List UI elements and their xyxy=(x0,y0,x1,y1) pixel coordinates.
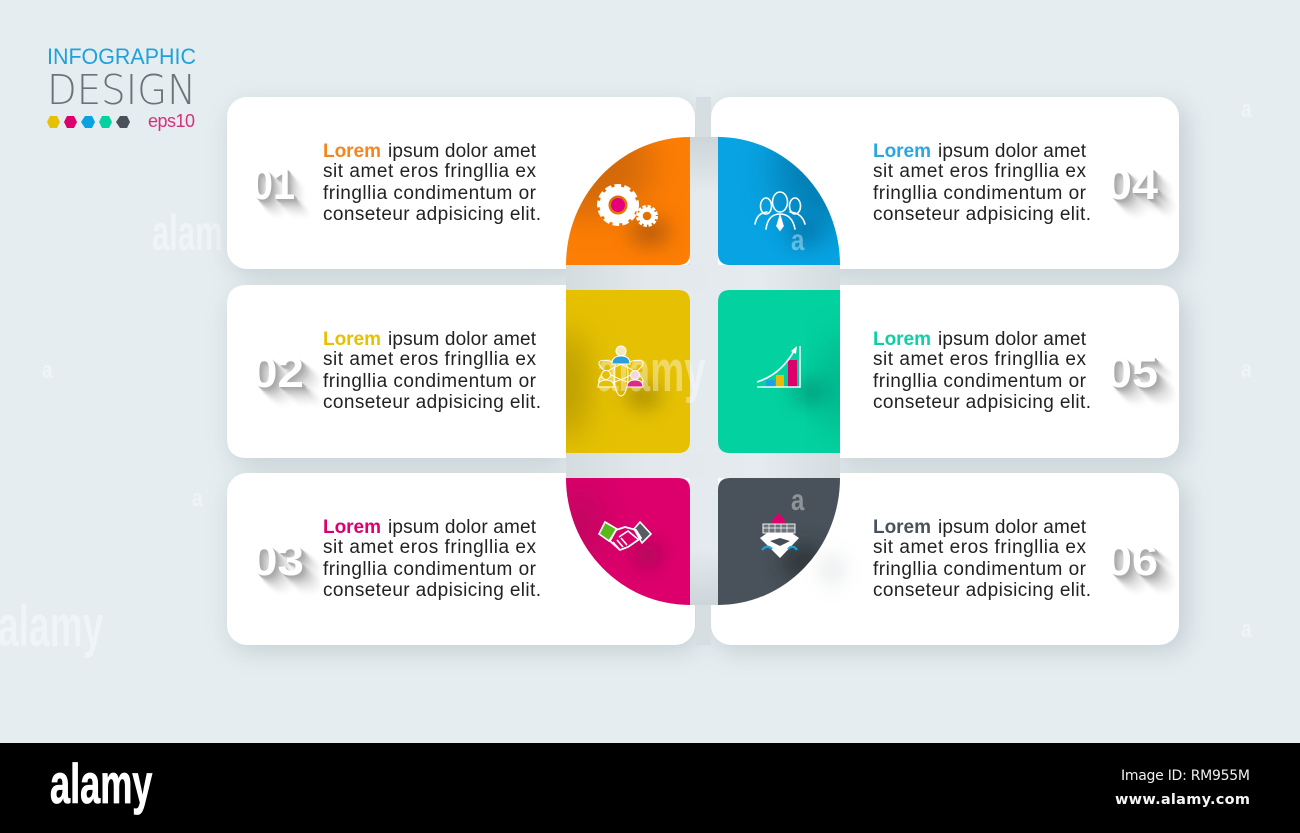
text block 01: sit amet eros fringllia ex xyxy=(323,161,536,182)
watermark: alamy left: alam xyxy=(152,204,223,261)
icon: ship xyxy=(760,513,799,558)
panel: card 06 xyxy=(711,473,1179,645)
text block 02: sit amet eros fringllia ex xyxy=(323,349,536,370)
text block 01 xyxy=(323,141,541,225)
watermark: alamy centre: alamy xyxy=(597,340,706,404)
quadrant: yellow xyxy=(566,290,690,453)
title: INFOGRAPHIC xyxy=(47,44,196,69)
number 04: 04 xyxy=(1106,160,1159,209)
number 03: 03 xyxy=(251,536,304,585)
text block 02: fringllia condimentum or xyxy=(323,371,537,392)
text block 04: fringllia condimentum or xyxy=(873,183,1087,204)
text block 05: sit amet eros fringllia ex xyxy=(873,349,1086,370)
text block 02 xyxy=(323,329,541,413)
quadrant shadow: dark grey outer xyxy=(820,554,844,586)
text block 01: ipsum dolor amet xyxy=(388,141,537,162)
text block 06: conseteur adpisicing elit. xyxy=(873,580,1091,601)
color hexagon legend xyxy=(47,116,130,128)
website: www.alamy.com xyxy=(1115,792,1250,808)
text block 04: conseteur adpisicing elit. xyxy=(873,204,1091,225)
text block 03: Lorem xyxy=(323,517,381,538)
text block 04: sit amet eros fringllia ex xyxy=(873,161,1086,182)
icon: growth chart xyxy=(757,346,800,387)
icon: people xyxy=(755,192,805,230)
title: DESIGN xyxy=(47,66,196,114)
watermark: alamy centre xyxy=(597,222,805,517)
text block 01: conseteur adpisicing elit. xyxy=(323,204,541,225)
watermark: alamy left: a xyxy=(192,484,203,512)
text block 05 xyxy=(873,329,1091,413)
quadrant: green xyxy=(718,290,840,453)
text block 01: Lorem xyxy=(323,141,381,162)
text block 05: conseteur adpisicing elit. xyxy=(873,392,1091,413)
text block 03: conseteur adpisicing elit. xyxy=(323,580,541,601)
text block 06: fringllia condimentum or xyxy=(873,559,1087,580)
quadrant: magenta xyxy=(566,478,690,605)
number 02: 02 xyxy=(251,348,304,397)
watermark: alamy centre: a xyxy=(791,482,805,517)
central cross gap xyxy=(566,97,840,645)
eps10 label: eps10 xyxy=(148,111,195,131)
number 01: 01 xyxy=(251,160,295,209)
quadrant: dark grey xyxy=(718,478,840,605)
text block 02: Lorem xyxy=(323,329,381,350)
watermark: alamy left: a xyxy=(1241,355,1252,383)
watermark: alamy left xyxy=(0,95,1252,659)
watermark: alamy left: a xyxy=(1241,615,1252,643)
icon: atom people xyxy=(596,346,646,396)
watermark: alamy left: alamy xyxy=(0,595,103,659)
text block 02: conseteur adpisicing elit. xyxy=(323,392,541,413)
title xyxy=(47,44,196,114)
text block 04: ipsum dolor amet xyxy=(938,141,1087,162)
panel: card 05 xyxy=(840,285,1179,458)
text block 06: sit amet eros fringllia ex xyxy=(873,537,1086,558)
text block 04 xyxy=(873,141,1091,225)
text block 03: ipsum dolor amet xyxy=(388,517,537,538)
text block 03: fringllia condimentum or xyxy=(323,559,537,580)
number 06: 06 xyxy=(1106,536,1158,585)
watermark: alamy left: a xyxy=(42,356,53,384)
text block 02: ipsum dolor amet xyxy=(388,329,537,350)
text block 03 xyxy=(323,517,541,601)
text block 03: sit amet eros fringllia ex xyxy=(323,537,536,558)
card shadows xyxy=(231,104,1187,652)
text block 01: fringllia condimentum or xyxy=(323,183,537,204)
watermark: alamy left: a xyxy=(1241,95,1252,123)
footer bar xyxy=(0,743,1300,833)
text block 06: Lorem xyxy=(873,517,931,538)
quadrant: orange xyxy=(566,137,690,265)
watermark: alamy centre: a xyxy=(791,222,805,257)
text block 06: ipsum dolor amet xyxy=(938,517,1087,538)
panel: card 04 xyxy=(711,97,1179,269)
text block 05: ipsum dolor amet xyxy=(938,329,1087,350)
text block 05: fringllia condimentum or xyxy=(873,371,1087,392)
icon: handshake xyxy=(599,522,651,550)
number 05: 05 xyxy=(1106,348,1158,397)
panel: card 01 xyxy=(227,97,695,269)
text block 06 xyxy=(873,517,1091,601)
footer logo: alamy xyxy=(50,752,152,815)
image id: Image ID: RM955M xyxy=(1121,768,1250,784)
text block 05: Lorem xyxy=(873,329,931,350)
quadrant: blue xyxy=(718,137,840,265)
panel: card 03 xyxy=(227,473,695,645)
panel: card 02 xyxy=(227,285,566,458)
text block 04: Lorem xyxy=(873,141,931,162)
icon: gears xyxy=(600,186,656,226)
